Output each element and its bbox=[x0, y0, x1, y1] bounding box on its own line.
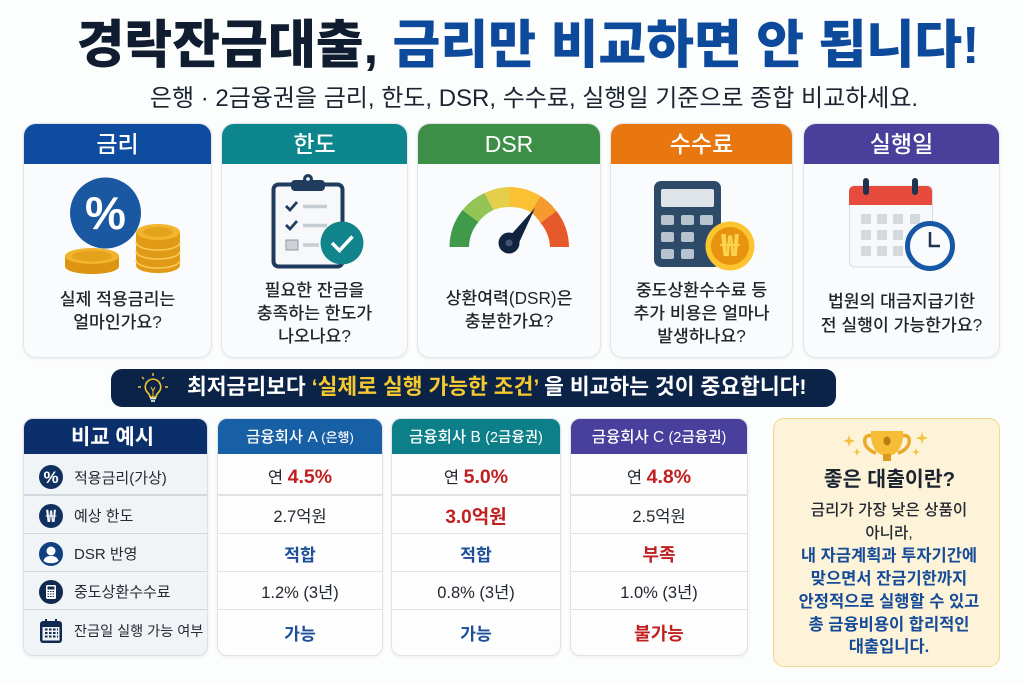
text: question: 충분한가요? bbox=[465, 311, 553, 331]
row: 잔금일 실행 가능 여부 bbox=[40, 619, 203, 643]
column: 금융회사 C: 불가능 bbox=[634, 624, 684, 644]
column: 금융회사 A: 적합 bbox=[284, 545, 316, 565]
header bbox=[217, 418, 383, 454]
heading: 좋은 대출이란? bbox=[824, 468, 955, 491]
text: explanation: 총 금융비용이 합리적인 bbox=[809, 616, 969, 634]
panel: 수수료 bbox=[610, 123, 793, 358]
text: question: 추가 비용은 얼마나 bbox=[633, 303, 770, 323]
panel: 실행일 bbox=[803, 123, 1000, 358]
row: 예상 한도 bbox=[24, 496, 207, 534]
text: question: 얼마인가요? bbox=[73, 312, 162, 332]
text: question: 법원의 대금지급기한 bbox=[828, 291, 975, 311]
heading: 한도: 한도 bbox=[293, 131, 336, 157]
icon: calculator with won coin bbox=[654, 181, 754, 270]
header bbox=[570, 418, 748, 454]
header: 금융회사 A (은행) bbox=[246, 429, 354, 446]
icon: percent and coins: % bbox=[85, 187, 126, 239]
header: 금융회사 B (2금융권) bbox=[409, 429, 543, 446]
text: question bbox=[257, 280, 372, 346]
column: 금융회사 C bbox=[570, 418, 748, 656]
icon: clipboard with check bbox=[272, 174, 364, 268]
icon: calculator bbox=[39, 580, 63, 604]
column: 금융회사 C: 부족 bbox=[642, 545, 676, 565]
heading: 실행일 bbox=[803, 123, 1000, 164]
column: 금융회사 B: 0.8% (3년) bbox=[437, 584, 515, 602]
text: explanation: 내 자금계획과 투자기간에 bbox=[801, 547, 977, 565]
text: explanation: 금리가 가장 낮은 상품이 bbox=[811, 502, 967, 519]
text: explanation: 아니라, bbox=[865, 525, 913, 542]
text: question: 상환여력(DSR)은 bbox=[446, 288, 572, 308]
header bbox=[391, 418, 561, 454]
text: explanation: 안정적으로 실행할 수 있고 bbox=[799, 593, 979, 611]
icon: won bbox=[39, 502, 63, 528]
column: 금융회사 A: 1.2% (3년) bbox=[261, 584, 339, 602]
heading: DSR bbox=[417, 123, 601, 164]
label: 중도상환수수료 bbox=[74, 584, 171, 601]
icon: calendar bbox=[40, 619, 62, 643]
header: 금융회사 C (2금융권) bbox=[592, 429, 726, 446]
text: question: 충족하는 한도가 bbox=[257, 303, 372, 323]
row: 중도상환수수료 bbox=[24, 572, 207, 610]
text: question: 필요한 잔금을 bbox=[265, 280, 364, 300]
label: DSR 반영 bbox=[74, 546, 137, 563]
panel: 한도 bbox=[221, 123, 408, 358]
text: banner message: 최저금리보다 ‘실제로 실행 가능한 조건’ 을 비교하는 것이 중요합니다! bbox=[187, 375, 807, 399]
heading: 수수료 bbox=[610, 123, 793, 164]
column: 금융회사 A bbox=[217, 418, 383, 656]
text: question bbox=[821, 291, 982, 335]
icon: calculator with won coin: ₩ bbox=[720, 221, 740, 265]
label: 예상 한도 bbox=[74, 508, 133, 525]
subtitle: 은행 · 2금융권을 금리, 한도, DSR, 수수료, 실행일 기준으로 종합 비교하세요. bbox=[150, 85, 918, 112]
column: 금융회사 A: 연 4.5% bbox=[268, 466, 332, 488]
text: explanation: 맞으면서 잔금기한까지 bbox=[811, 570, 967, 588]
heading: 비교 예시: 비교 예시 bbox=[71, 426, 154, 449]
heading: 실행일: 실행일 bbox=[870, 131, 933, 157]
column: 금융회사 B: 3.0억원 bbox=[445, 507, 507, 528]
column: 금융회사 B: 적합 bbox=[460, 545, 492, 565]
icon: gauge bbox=[450, 187, 569, 254]
icon: light bulb bbox=[138, 373, 168, 402]
text: question bbox=[446, 288, 572, 331]
icon: calendar with clock bbox=[849, 178, 955, 271]
column: 금융회사 C: 2.5억원 bbox=[632, 508, 686, 526]
column: 금융회사 B: 가능 bbox=[460, 624, 492, 644]
panel: 좋은 대출이란 bbox=[773, 418, 1000, 667]
heading: DSR: DSR bbox=[485, 131, 533, 157]
heading: 한도 bbox=[221, 123, 408, 164]
title: 경락잔금대출, 금리만 비교하면 안 됩니다! bbox=[77, 17, 979, 75]
icon: percent: % bbox=[43, 468, 59, 487]
row: DSR 반영 bbox=[24, 534, 207, 572]
heading: 수수료: 수수료 bbox=[670, 131, 733, 157]
heading: 금리 bbox=[23, 123, 212, 164]
panel: 금리 bbox=[23, 123, 212, 358]
icon: trophy bbox=[863, 431, 911, 461]
text: question: 실제 적용금리는 bbox=[60, 289, 175, 309]
panel: DSR bbox=[417, 123, 601, 358]
icon: percent and coins bbox=[65, 178, 181, 274]
column: 금융회사 C: 연 4.8% bbox=[627, 466, 691, 488]
label: 잔금일 실행 가능 여부 bbox=[74, 624, 203, 640]
text: explanation: 대출입니다. bbox=[849, 638, 929, 656]
column: 금융회사 A: 가능 bbox=[284, 624, 316, 644]
callout banner bbox=[111, 369, 836, 407]
row: 적용금리 bbox=[24, 454, 207, 496]
column: 금융회사 B: 연 5.0% bbox=[444, 466, 508, 488]
text: question: 나오나요? bbox=[278, 326, 351, 346]
icon: sparkles bbox=[843, 432, 928, 456]
text: explanation bbox=[799, 502, 979, 656]
label: 적용금리(가상) bbox=[74, 470, 167, 487]
icon: won: ₩ bbox=[45, 502, 57, 527]
column: 금융회사 B bbox=[391, 418, 561, 656]
icon: percent bbox=[39, 465, 63, 489]
text: question: 발생하나요? bbox=[657, 326, 746, 346]
text: question: 중도상환수수료 등 bbox=[636, 280, 767, 300]
text: question: 전 실행이 가능한가요? bbox=[821, 315, 982, 335]
heading: 비교 예시 bbox=[23, 418, 208, 454]
text: question bbox=[633, 280, 770, 346]
icon: person bbox=[39, 542, 63, 566]
heading: 금리: 금리 bbox=[96, 131, 139, 157]
column: 금융회사 C: 1.0% (3년) bbox=[620, 584, 698, 602]
panel: comparison row labels bbox=[23, 418, 208, 656]
column: 금융회사 A: 2.7억원 bbox=[273, 508, 327, 526]
text: question bbox=[60, 289, 175, 332]
